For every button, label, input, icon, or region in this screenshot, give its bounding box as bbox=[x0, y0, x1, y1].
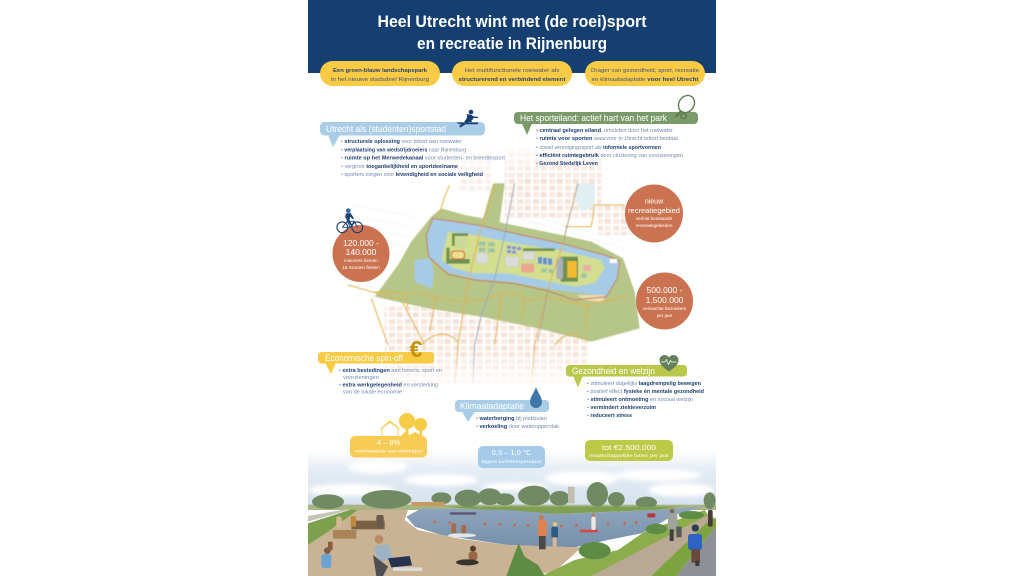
bullet list: gezondheid: • positief effect fysieke én mentale gezondheid bbox=[587, 389, 705, 395]
stat circle: nieuw recreatiegebied: recreatiegebied bbox=[628, 208, 680, 215]
pill: groen-blauw landschapspark: in het nieuwe stadsdeel Rijnenburg bbox=[331, 77, 429, 83]
infographic bbox=[308, 0, 716, 576]
bullet list: sportstad bbox=[341, 139, 505, 178]
panel: Economische spin-off bbox=[318, 336, 442, 396]
icon: house and trees bbox=[380, 413, 427, 438]
stat circle: verwachte bezoekers: 1.500.000 bbox=[646, 295, 684, 305]
panel: Het sporteiland bbox=[514, 92, 698, 167]
pill: groen-blauw landschapspark: Een groen-blauw landschapspark bbox=[333, 68, 428, 74]
bullet list: gezondheid bbox=[587, 381, 705, 419]
icon: cyclist bbox=[337, 208, 363, 233]
stat box: lagere luchttemperatuur: lagere luchttemperatuur bbox=[482, 459, 542, 465]
bullet list: klimaat: • verkoeling door wateroppervlak bbox=[476, 424, 559, 430]
stat circle: inwoners binnen 15 minuten fietsen: 15 minuten fietsen bbox=[342, 265, 380, 270]
pill: multifunctionele roeiwater: Het multifunctionele roeiwater als bbox=[464, 68, 560, 74]
bullet list: sporteiland: • Gezond Stedelijk Leven bbox=[536, 161, 599, 167]
bullet list: sporteiland bbox=[536, 128, 683, 167]
bullet list: gezondheid: • reduceert stress bbox=[587, 413, 632, 419]
pill: multifunctionele roeiwater: structurerend en verbindend element bbox=[458, 77, 566, 83]
heading: gezondheid en welzijn: Gezondheid en welzijn bbox=[572, 366, 655, 377]
stat circle: nieuw recreatiegebied bbox=[625, 184, 683, 242]
stat circle: nieuw recreatiegebied: verlost bestaande bbox=[636, 216, 673, 221]
bullet list: sporteiland: • zowel verenigingssport als informele sportvormen bbox=[536, 145, 662, 151]
panel: Utrecht als (studenten)sportstad bbox=[320, 110, 505, 178]
stat circle: inwoners binnen 15 minuten fietsen: 120.000 - bbox=[343, 238, 379, 248]
stat circle: verwachte bezoekers: per jaar bbox=[657, 313, 673, 318]
bullet list: sportstad: • sporters zorgen voor levendigheid en sociale veiligheid bbox=[341, 172, 484, 178]
photo: recreation beach at the rowing water bbox=[308, 450, 716, 576]
heading: studentensportstad bbox=[320, 122, 485, 147]
stat box: lagere luchttemperatuur: 0,3 – 1,0 °C bbox=[492, 448, 532, 457]
pill: groen-blauw landschapspark bbox=[320, 61, 440, 86]
stat box: meerwaarde woningen: meerwaarde van woningen bbox=[354, 448, 423, 454]
stat circle: nieuw recreatiegebied: nieuw bbox=[645, 198, 664, 206]
stat box: lagere luchttemperatuur bbox=[478, 446, 545, 468]
bullet list: economie: • extra bestedingen aan horeca, sport en bbox=[339, 368, 442, 374]
bullet list: klimaat: • waterberging bij piekbuien bbox=[476, 416, 547, 422]
bullet list: sporteiland: • centraal gelegen eiland, omsloten door het roeiwater bbox=[536, 128, 673, 134]
bullet list: economie: van de lokale economie bbox=[343, 390, 402, 396]
bullet list: sportstad: • verplaatsing van wedstrijdroeiers naar Rijnenburg bbox=[341, 148, 466, 154]
stat box: meerwaarde woningen: 4 – 8% bbox=[377, 438, 401, 447]
stat circle: inwoners binnen 15 minuten fietsen: inwoners binnen bbox=[344, 258, 378, 263]
title: Heel Utrecht wint met (de roei)sport bbox=[378, 12, 647, 31]
panel: Klimaatadaptatie bbox=[455, 387, 559, 430]
bullet list: gezondheid: • vermindert ziekteverzuim bbox=[587, 405, 656, 411]
bullet list: sporteiland: • efficiënt ruimtegebruik door clustering van voorzieningen bbox=[536, 153, 683, 159]
icon: tennis racket bbox=[675, 92, 698, 119]
bullet list: sportstad: • structurele oplossing voor tekort aan roeiwater bbox=[341, 139, 462, 145]
bullet list: sportstad: • ruimte op het Merwedekanaal voor studenten- en breedtesport bbox=[341, 156, 505, 162]
bullet list: klimaat bbox=[476, 416, 559, 430]
title bbox=[378, 12, 647, 53]
bullet list: gezondheid: • stimuleert ontmoeting en sociaal welzijn bbox=[587, 397, 693, 403]
stat circle: nieuw recreatiegebied: recreatiegebieden bbox=[636, 223, 673, 228]
bullet list: sporteiland: • ruimte voor sporten waarvoor in Utrecht tekort bestaat bbox=[536, 136, 678, 142]
people bbox=[321, 509, 713, 576]
icon: water drop bbox=[530, 387, 542, 408]
title: en recreatie in Rijnenburg bbox=[417, 34, 607, 53]
pill: drager van gezondheid: Drager van gezondheid, sport, recreatie bbox=[591, 68, 699, 74]
stat circle: verwachte bezoekers: verwachte bezoekers bbox=[643, 306, 687, 311]
bullet list: economie: • extra werkgelegenheid en versterking bbox=[339, 382, 438, 388]
pill: multifunctionele roeiwater bbox=[452, 61, 572, 86]
bullet list: economie: voorzieningen bbox=[343, 375, 379, 381]
bullet list: economie bbox=[339, 368, 442, 396]
bullet list: sportstad: • vergroot toegankelijkheid en sportdeelname bbox=[341, 164, 458, 170]
stat box: maatschappelijke baten: tot €2.500.000 bbox=[602, 443, 656, 452]
icon: rower bbox=[456, 110, 478, 128]
panel: Gezondheid en welzijn bbox=[566, 355, 705, 419]
heading: sporteiland: Het sporteiland: actief hart van het park bbox=[520, 113, 667, 124]
heading: sporteiland bbox=[514, 112, 698, 135]
icon: heart with pulse bbox=[660, 355, 678, 372]
heading: studentensportstad: Utrecht als (studenten)sportstad bbox=[326, 124, 446, 135]
map: landscape park plan bbox=[347, 149, 640, 385]
heading: economische spin-off: Economische spin-off bbox=[325, 353, 403, 364]
bullet list: gezondheid: • stimuleert dagelijks laagdrempelig bewegen bbox=[587, 381, 702, 387]
stat box: maatschappelijke baten bbox=[585, 440, 673, 461]
heading: klimaatadaptatie: Klimaatadaptatie bbox=[460, 401, 524, 412]
pill: drager van gezondheid: en klimaatadaptatie voor heel Utrecht bbox=[592, 77, 699, 83]
stat circle: inwoners binnen 15 minuten fietsen: 140.000 bbox=[346, 247, 377, 257]
stat box: maatschappelijke baten: maatschappelijke baten per jaar bbox=[589, 453, 669, 459]
header band bbox=[308, 0, 716, 73]
stat circle: verwachte bezoekers: 500.000 - bbox=[647, 285, 683, 295]
stat box: meerwaarde woningen bbox=[350, 436, 427, 458]
pill: drager van gezondheid bbox=[585, 61, 705, 86]
icon: euro sign: € bbox=[410, 336, 423, 362]
stat circle: verwachte bezoekers bbox=[636, 272, 693, 330]
stat circle: inwoners binnen 15 minuten fietsen bbox=[332, 225, 390, 282]
